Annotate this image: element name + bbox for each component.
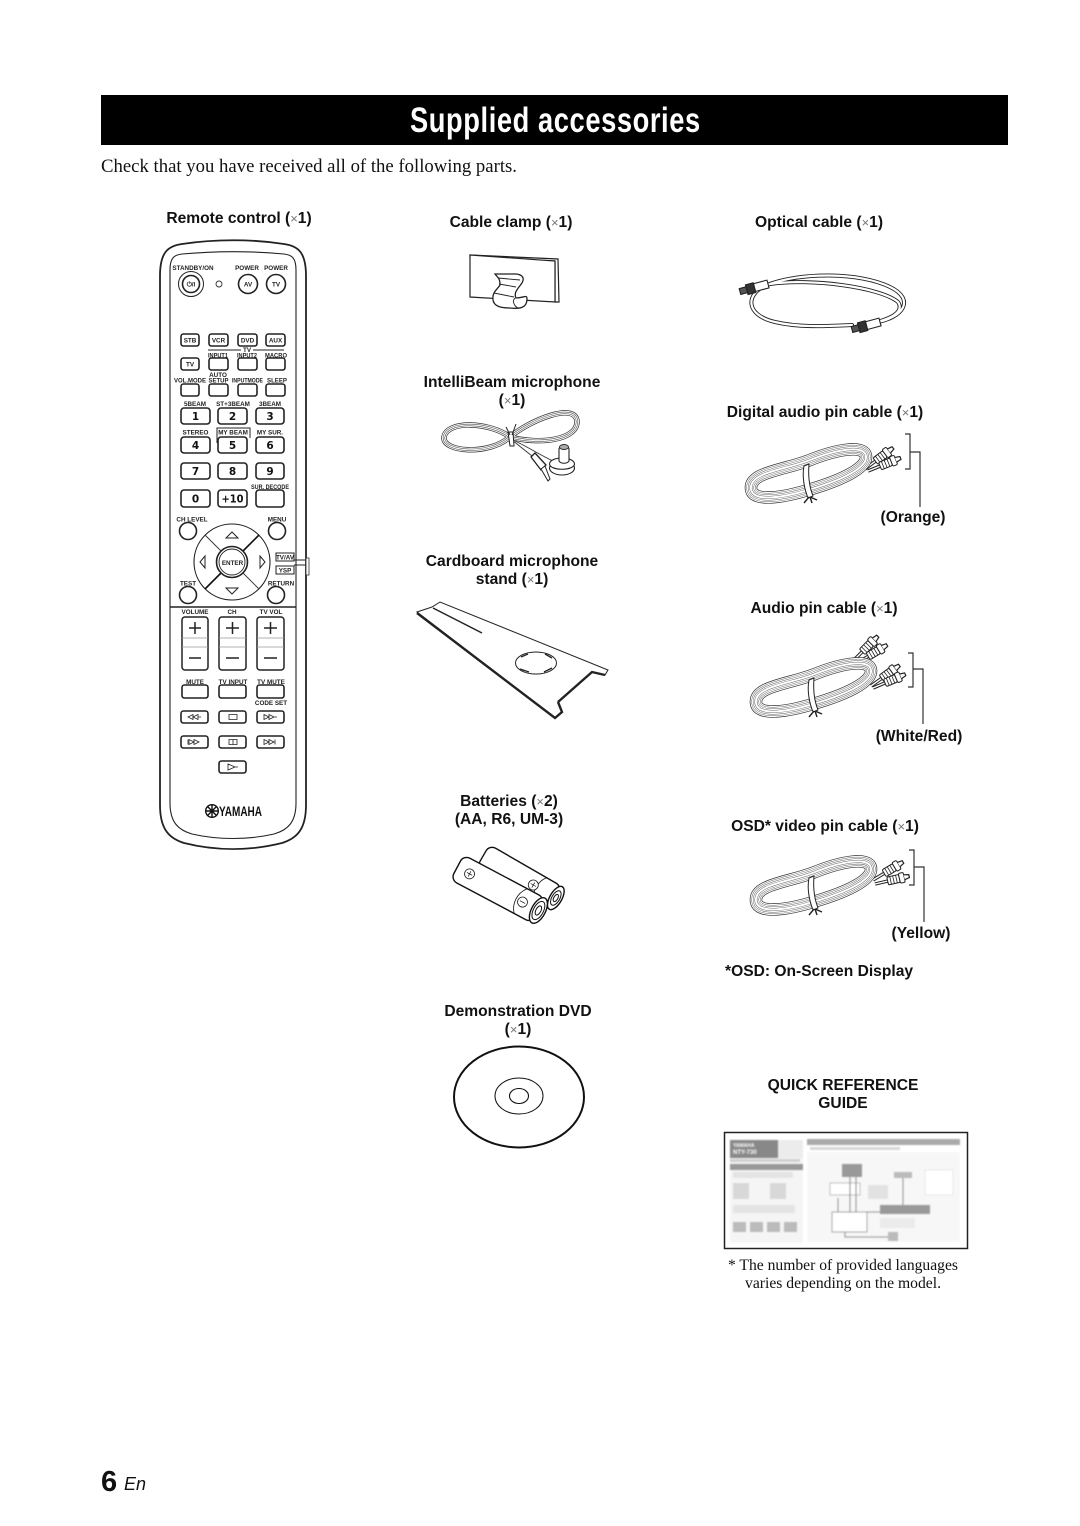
label: audio pin cable: Audio pin cable (×1) <box>750 600 898 617</box>
quick reference guide thumbnail: YAMAHA <box>733 1143 755 1149</box>
number buttons: +10 <box>222 494 244 506</box>
input and mode buttons: VOL.MODE <box>174 378 206 384</box>
power buttons: POWER <box>235 265 259 272</box>
label: remote control: Remote control (×1) <box>166 210 312 227</box>
audio pin cable illustration <box>756 633 923 724</box>
power buttons: STANDBY/ON <box>172 265 214 272</box>
DVD illustration <box>454 1046 584 1148</box>
power buttons: TV <box>272 282 281 288</box>
label: batteries: (AA, R6, UM-3) <box>455 811 563 828</box>
label: IntelliBeam microphone: (×1) <box>499 392 525 409</box>
volume and channel rockers: TV VOL <box>260 609 283 616</box>
input and mode buttons: SETUP <box>208 378 228 384</box>
TV/AV and YSP switch: TV/AV <box>276 554 295 562</box>
label: white/red: (White/Red) <box>876 728 962 745</box>
page number: En <box>124 1474 146 1494</box>
number buttons: ST+3BEAM <box>216 401 250 408</box>
intro text: Check that you have received all of the following parts. <box>101 156 517 177</box>
number buttons: 6 <box>266 440 274 452</box>
label: quick reference guide: QUICK REFERENCE <box>768 1077 918 1094</box>
cable clamp illustration <box>470 255 559 308</box>
remote body <box>160 240 306 849</box>
number buttons: 2 <box>229 411 236 423</box>
number buttons: MY SUR. <box>257 430 283 436</box>
page number: 6 <box>101 1466 117 1498</box>
number buttons: 9 <box>266 466 274 478</box>
TV/AV and YSP switch: YSP <box>279 568 291 574</box>
language note <box>728 1257 958 1292</box>
input and mode buttons: INPUTMODE <box>232 378 263 384</box>
volume and channel rockers <box>182 609 284 670</box>
page number <box>101 1466 146 1498</box>
digital audio pin cable illustration <box>751 434 920 507</box>
power buttons: ⏻/I <box>187 282 195 288</box>
number buttons <box>181 401 289 507</box>
OSD video pin cable illustration <box>756 850 924 922</box>
input and mode buttons <box>174 352 287 396</box>
number buttons: 5 <box>229 440 236 452</box>
source buttons <box>181 334 285 354</box>
mute and transport buttons: TV INPUT <box>219 679 247 686</box>
navigation pad: RETURN <box>268 580 295 588</box>
Yamaha logo <box>206 803 262 819</box>
language note: * The number of provided languages <box>728 1257 958 1274</box>
power buttons: POWER <box>264 265 288 272</box>
optical cable illustration <box>739 275 904 334</box>
TV/AV and YSP switch <box>276 553 309 575</box>
navigation pad: ENTER <box>222 560 244 567</box>
mute and transport buttons <box>181 679 287 773</box>
title bar <box>101 95 1008 145</box>
input and mode buttons: INPUT2 <box>237 352 257 360</box>
label: cable clamp: Cable clamp (×1) <box>450 214 572 231</box>
number buttons: STEREO <box>183 430 209 436</box>
label: optical cable: Optical cable (×1) <box>755 214 883 231</box>
source buttons: AUX <box>269 338 283 344</box>
number buttons: MY BEAM <box>218 430 248 436</box>
input and mode buttons: INPUT1 <box>208 352 228 360</box>
input and mode buttons: MACRO <box>265 352 287 360</box>
label: cardboard microphone stand: Cardboard microphone <box>426 553 598 570</box>
number buttons: SUR. DECODE <box>251 484 289 491</box>
power buttons: AV <box>244 282 253 288</box>
Yamaha logo: YAMAHA <box>219 803 262 819</box>
source buttons: DVD <box>241 338 255 344</box>
input and mode buttons: AUTO <box>209 372 227 379</box>
power buttons <box>172 265 288 296</box>
number buttons: 4 <box>192 440 199 452</box>
input and mode buttons: TV <box>186 362 195 368</box>
number buttons: 8 <box>229 466 236 478</box>
batteries illustration <box>451 845 568 926</box>
navigation pad <box>176 516 295 604</box>
label: cardboard microphone stand: stand (×1) <box>476 571 548 588</box>
source buttons: TV <box>243 347 252 354</box>
label: yellow: (Yellow) <box>892 925 950 942</box>
source buttons: STB <box>184 338 197 344</box>
volume and channel rockers: CH <box>227 609 237 616</box>
volume and channel rockers: VOLUME <box>182 609 208 616</box>
number buttons: 3 <box>266 411 274 423</box>
mute and transport buttons: MUTE <box>186 679 204 686</box>
remote control illustration <box>160 240 309 849</box>
navigation pad: CH LEVEL <box>176 516 208 524</box>
label: IntelliBeam microphone: IntelliBeam microphone <box>424 374 600 391</box>
mute and transport buttons: TV MUTE <box>257 679 285 686</box>
label: demonstration DVD: (×1) <box>505 1021 531 1038</box>
label: batteries: Batteries (×2) <box>460 793 558 810</box>
label: quick reference guide: GUIDE <box>818 1095 868 1112</box>
label: demonstration DVD: Demonstration DVD <box>444 1003 592 1020</box>
cardboard microphone stand illustration <box>417 602 608 718</box>
quick reference guide thumbnail: NTY-730 <box>733 1150 757 1156</box>
navigation pad: TEST <box>180 580 196 588</box>
OSD footnote: *OSD: On-Screen Display <box>725 963 913 980</box>
mute and transport buttons: CODE SET <box>255 700 287 707</box>
number buttons: 1 <box>192 411 199 423</box>
title bar: Supplied accessories <box>410 101 700 140</box>
label: orange: (Orange) <box>881 509 945 526</box>
source buttons: VCR <box>212 338 226 344</box>
IntelliBeam microphone illustration <box>444 413 577 481</box>
label: OSD video pin cable: OSD* video pin cable (×1) <box>731 818 919 835</box>
number buttons: 0 <box>192 494 199 506</box>
input and mode buttons: SLEEP <box>267 378 287 384</box>
language note: varies depending on the model. <box>745 1275 941 1292</box>
number buttons: 5BEAM <box>184 401 206 408</box>
number buttons: 7 <box>192 466 199 478</box>
quick reference guide thumbnail <box>724 1132 968 1248</box>
label: digital audio pin cable: Digital audio pin cable (×1) <box>727 404 923 421</box>
number buttons: 3BEAM <box>259 401 281 408</box>
navigation pad: MENU <box>268 516 287 524</box>
